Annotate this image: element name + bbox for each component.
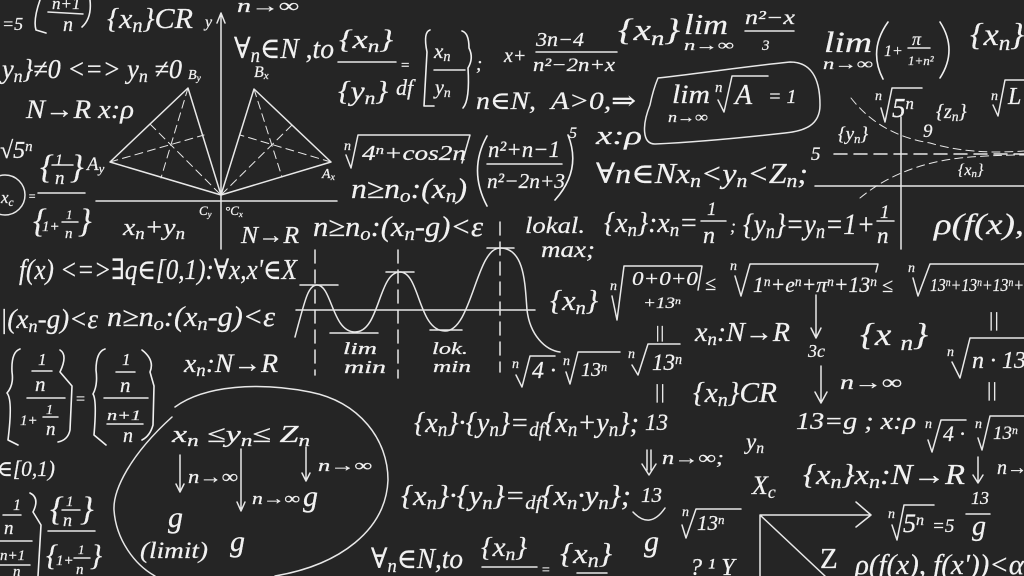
coordinate axes with two triangles: y xyxy=(203,14,213,31)
formula: compound fraction equality: 1+ xyxy=(20,413,38,429)
chart: graph with converging sequences: {yn} xyxy=(838,124,868,146)
formula: limit n squared minus x over 3: lim xyxy=(684,9,728,41)
formula: root 5 top right xyxy=(875,88,922,123)
formula: 13 over g: 13 xyxy=(971,488,989,508)
formula: root 13 bottom xyxy=(682,505,741,538)
coordinate axes with two triangles: °Cx xyxy=(225,203,243,219)
formula: root 5 equals 5: 5n xyxy=(903,509,924,538)
formula: root n times 13: n xyxy=(947,345,954,360)
formula: limit circle: = xyxy=(28,189,36,203)
formula: bottom left fractions: } xyxy=(80,491,94,528)
formula: limit circle: xc xyxy=(0,188,14,209)
text: local max: max; xyxy=(541,237,595,262)
formula: 13 underbrace g: g xyxy=(644,525,659,558)
formula: root L right edge xyxy=(991,80,1024,116)
chart: wave with extremes: min xyxy=(344,357,386,377)
formula: root 4 dot root 13 in middle: 13n xyxy=(581,359,607,381)
formula: compound fraction equality: 1 xyxy=(38,350,46,369)
formula: compound fraction equality: n xyxy=(123,425,133,447)
chart: wave with extremes: lok. xyxy=(432,339,468,358)
formula: x_n equals 1 over n: 1 xyxy=(707,199,716,220)
formula: root of thirteens: 13n+13n+13n+ xyxy=(930,275,1024,295)
formula: compound fraction equality: 1 xyxy=(122,350,130,369)
coordinate axes with two triangles: Cy xyxy=(199,203,212,219)
arrow: implies n to infinity: n→∞; xyxy=(662,448,724,469)
formula: y_n equals 1 plus 1 over n: 1 xyxy=(880,202,890,223)
formula: root 4 dot root 13 in middle: || xyxy=(655,323,664,342)
formula: y_n equals 1 plus 1 over n: {yn}=yn=1+ xyxy=(743,208,875,243)
formula: for all n less than: ∀n∈Nx n<yn<Zn; xyxy=(596,159,808,192)
formula: root n times 13: || xyxy=(988,309,999,331)
formula: n at least n0 second row: n≥no:(xn-g)<ε xyxy=(107,302,275,335)
formula: root 4 dot root 13 right: 13n xyxy=(993,423,1018,444)
formula: bottom left fractions: 1+ xyxy=(56,553,74,569)
arrow: down to 3c xyxy=(807,295,827,403)
formula: bottom left fractions: { xyxy=(46,539,58,572)
arrow: down to n to infinity xyxy=(973,457,1024,483)
text: local max: lokal. xyxy=(525,213,585,238)
formula: x_n from N to R: xn:N→R xyxy=(183,349,278,380)
formula: x_n equals 1 over n: n xyxy=(703,223,715,249)
formula: n at least n0 x_n minus g: n≥no:(xn-g)<ε xyxy=(313,212,483,245)
formula: bottom left fractions: 1 xyxy=(78,542,84,557)
coordinate axes with two triangles xyxy=(85,13,337,249)
formula: compound fraction equality xyxy=(7,349,154,447)
formula: limit n squared minus x over 3: n²−x xyxy=(745,7,795,29)
callout: rounded box limit root A: A xyxy=(733,80,753,111)
formula: x_n equals 1 over n xyxy=(604,199,736,249)
formula: for all n bottom fraction xyxy=(371,532,612,576)
formula: x_n subset of R: {xn}CR xyxy=(107,3,193,37)
formula: root 4 dot root 13 right xyxy=(925,416,1024,452)
formula: fraction x_n over y_n xyxy=(338,25,482,108)
formula: root sum of powers: n xyxy=(730,259,737,274)
formula: root zeros plus 13: ≤ xyxy=(705,273,716,295)
formula: root 13 bottom: 13n xyxy=(697,511,725,535)
formula: nested fraction left xyxy=(33,149,92,242)
formula: bottom left fractions: } xyxy=(90,539,102,572)
formula: root 4 dot root 13 in middle: 13n xyxy=(652,350,682,375)
callout: rounded box limit root A: n→∞ xyxy=(668,110,708,126)
callout: ellipse with squeeze theorem: g xyxy=(168,501,183,534)
formula: y_n and X_c labels: Xc xyxy=(751,471,776,502)
formula: x_n brace top: {x n} xyxy=(618,12,681,50)
formula: nested fraction left: n xyxy=(55,168,64,189)
formula: fraction x_n over y_n: df xyxy=(396,75,416,100)
formula: root 4 dot root 13 in middle: n xyxy=(563,354,570,369)
formula: fraction x_n over y_n: ; xyxy=(476,54,482,75)
diagram: triangle with arrow: Z xyxy=(820,543,838,575)
chart: wave with extremes: min xyxy=(433,357,471,376)
formula: y_n and X_c labels: yn xyxy=(744,429,764,457)
arrow: down to 3c: 3c xyxy=(807,341,825,361)
arrow: implies n to infinity xyxy=(642,448,724,475)
formula: x_n brace right: {x n} xyxy=(860,316,928,355)
formula: x_n then N to R lower right: {xn}xn:N→R xyxy=(803,460,965,493)
formula: power of five fraction: n²+n−1 xyxy=(488,137,560,162)
callout: rounded box limit root A xyxy=(645,62,820,144)
formula: 13 underbrace g xyxy=(633,483,665,558)
formula: compound fraction equality: n xyxy=(46,419,56,440)
formula: root 5 equals 5 xyxy=(888,505,954,540)
formula: root 14 power n plus cos xyxy=(344,135,470,168)
formula: root 5 top right: n xyxy=(875,89,882,104)
formula: y_n equals 1 plus 1 over n: n xyxy=(877,223,888,248)
formula: root zeros plus 13 xyxy=(610,266,716,320)
formula: x_n plus y_n: xn+yn xyxy=(122,215,185,243)
formula: root 5 equals 5: =5 xyxy=(932,516,954,537)
formula: limit circle xyxy=(0,175,36,215)
formula: x_n brace beside wave: {xn} xyxy=(550,286,598,319)
formula: root of thirteens: n xyxy=(908,261,915,276)
formula: root zeros plus 13: 0+0+0 xyxy=(632,268,698,290)
formula: 13 over g xyxy=(966,488,990,542)
formula: x_n brace top right: {xn} xyxy=(970,16,1024,55)
formula: bottom left fractions: { xyxy=(50,491,64,528)
formula: rho f of x: ρ(f(x), xyxy=(933,208,1024,241)
formula: limit one plus pi: π xyxy=(912,29,922,49)
formula: fraction 3n minus 4 xyxy=(503,29,617,76)
formula: root of thirteens xyxy=(908,261,1024,296)
chart: graph with converging sequences: 5 xyxy=(811,144,820,165)
formula: root 4 dot root 13 right: n xyxy=(925,417,932,432)
callout: rounded box limit root A: lim xyxy=(672,80,710,109)
formula: fraction x_n over y_n: xn xyxy=(433,39,450,65)
coordinate axes with two triangles: By xyxy=(188,68,202,84)
formula: fraction x_n over y_n: = xyxy=(400,58,410,74)
formula: root 4 dot root 13 in middle: 4 · xyxy=(532,358,556,384)
diagram: triangle with arrow xyxy=(760,502,871,576)
formula: limit n squared minus x over 3: 3 xyxy=(761,38,770,54)
callout: ellipse with squeeze theorem: n→∞ xyxy=(318,456,372,475)
formula: root five left: √5n xyxy=(0,138,33,164)
formula: for all n bottom fraction: {xn} xyxy=(560,538,612,572)
formula: root zeros plus 13: +13 n xyxy=(643,295,681,312)
formula: bottom left fractions: 1 xyxy=(13,497,21,514)
formula: bottom left fractions: 1 xyxy=(66,494,74,510)
callout: ellipse with squeeze theorem: n→∞ xyxy=(188,467,238,488)
formula: limit one plus pi: 1+n² xyxy=(908,53,935,68)
formula: x_n subset R centre: {xn}CR xyxy=(693,378,777,411)
formula: bottom left fractions xyxy=(0,491,102,576)
formula: 13 over g: g xyxy=(972,511,986,542)
formula: n at least n0: n≥n o:(xn) xyxy=(351,174,467,207)
callout: ellipse with squeeze theorem: (limit) xyxy=(140,538,208,563)
chart: wave with extremes: lim xyxy=(343,339,377,358)
formula: x_n equals 1 over n: ; xyxy=(730,216,736,236)
formula: N to R x rho: N→R x:ρ xyxy=(25,95,134,124)
formula: bottom left fractions: n+1 xyxy=(0,548,25,564)
number: 13 after sum: 13 xyxy=(645,410,668,435)
formula: nested fraction left: 1 xyxy=(66,207,72,222)
formula: fraction 3n minus 4: n²−2n+x xyxy=(533,55,616,76)
coordinate axes with two triangles: Ay xyxy=(85,154,105,176)
formula: root 14 power n plus cos: 4n+cos2n xyxy=(362,141,466,165)
chart: graph with converging sequences: {zn} xyxy=(936,101,967,124)
callout: ellipse with squeeze theorem xyxy=(114,387,388,576)
formula: root 4 dot root 13 in middle: n xyxy=(512,357,519,372)
chart: graph with converging sequences xyxy=(811,98,1024,249)
formula: fraction 3n minus 4: 3n−4 xyxy=(535,29,584,51)
formula: y_n not zero: yn}≠0 <=> yn ≠0 xyxy=(0,54,182,86)
formula: root 4 dot root 13 in middle xyxy=(512,323,682,403)
callout: rounded box limit root A: = 1 xyxy=(768,86,796,108)
formula: power of five fraction: n²−2n+3 xyxy=(487,169,565,193)
formula: limit one plus pi: n→∞ xyxy=(823,56,873,73)
formula: root L right edge: L xyxy=(1007,84,1021,110)
formula: root 14 power n plus cos: n xyxy=(344,139,351,154)
formula: top left fraction equals five: =5 xyxy=(2,14,23,34)
formula: 13 equals g x rho: 13=g ; x:ρ xyxy=(796,409,916,435)
formula: fraction 3n minus 4: x+ xyxy=(503,45,526,67)
callout: ellipse with squeeze theorem: n→∞ xyxy=(252,489,300,508)
formula: for all n bottom fraction: {xn} xyxy=(481,532,527,564)
callout: ellipse with squeeze theorem: g xyxy=(303,480,318,513)
callout: ellipse with squeeze theorem: g xyxy=(230,525,245,558)
formula: root zeros plus 13: n xyxy=(610,279,617,294)
formula: nested fraction left: n xyxy=(65,226,72,242)
formula: root 4 dot root 13 in middle: n xyxy=(628,347,635,362)
formula: root 5 equals 5: n xyxy=(888,507,895,522)
formula: root 4 dot root 13 in middle: || xyxy=(654,381,665,403)
formula: power of five fraction xyxy=(478,125,577,206)
formula: product of sequences: {xn}·{yn}=df{xn·yn}; xyxy=(401,481,631,514)
formula: nested fraction left: { xyxy=(33,203,47,240)
formula: n to infinity right of arrow: n→∞ xyxy=(840,372,902,394)
formula: root sum of powers: 1n+en+πn+13n xyxy=(753,272,877,297)
formula: root 13 bottom: n xyxy=(682,505,689,520)
callout: rounded box limit root A: n xyxy=(715,80,722,96)
formula: compound fraction equality: n xyxy=(120,373,130,397)
formula: limit one plus pi xyxy=(823,22,949,79)
formula: x_n equals 1 over n: {xn}:xn= xyxy=(604,208,698,241)
formula: root L right edge: n xyxy=(991,89,998,104)
formula: limit one plus pi: lim xyxy=(824,26,872,59)
formula: root sum of powers: ≤ xyxy=(882,275,893,297)
formula: root sum of powers xyxy=(730,259,893,297)
formula: x rho middle: x:ρ xyxy=(595,121,642,150)
formula: nested fraction left: 1 xyxy=(55,152,63,169)
formula: bottom left fractions: n xyxy=(63,510,72,530)
formula: fraction x_n over y_n: {yn} xyxy=(338,76,388,108)
formula: nested fraction left: 1+ xyxy=(42,219,60,235)
chart: graph with converging sequences: 9 xyxy=(923,121,933,142)
formula: root n times 13 xyxy=(947,309,1024,401)
formula: 13 underbrace g: 13 xyxy=(641,483,662,507)
formula: top left fraction equals five xyxy=(2,0,90,36)
formula: fraction x_n over y_n: {x n} xyxy=(339,25,394,56)
formula: fraction x_n over y_n: yn xyxy=(433,77,451,100)
formula: compound fraction equality: = xyxy=(75,391,86,408)
formula: n in N: n∈N, xyxy=(476,88,536,115)
formula: compound fraction equality: n+1 xyxy=(107,408,141,424)
formula: A greater than 0 implies: A>0,⇒ xyxy=(549,88,636,115)
callout: ellipse with squeeze theorem: x n ≤y n≤ Z n xyxy=(171,422,310,450)
formula: limit one plus pi: 1+ xyxy=(884,43,903,60)
coordinate axes with two triangles: Ax xyxy=(321,167,336,183)
formula: bottom left fractions: n xyxy=(4,518,14,539)
formula: left edge x_n minus g: |(xn-g)<ε xyxy=(0,304,98,336)
formula: power of five fraction: 5 xyxy=(569,125,577,142)
formula: for all n in N: ∀n∈N ,to xyxy=(234,33,334,67)
chart: graph with converging sequences: {xn} xyxy=(958,162,984,180)
chart: wave with extremes xyxy=(295,222,560,378)
formula: y_n and X_c labels xyxy=(744,429,776,502)
formula: compound fraction equality: 1 xyxy=(46,403,53,418)
formula: nested fraction left: } xyxy=(78,203,92,240)
formula: limit n squared minus x over 3: n→∞ xyxy=(684,38,734,54)
formula: top left fraction equals five: n xyxy=(63,14,73,36)
formula: root 4 dot root 13 right: 4 · xyxy=(943,421,965,446)
formula: x_n N to R centre right: xn:N→R xyxy=(694,317,791,349)
formula: nested fraction left: } xyxy=(70,149,84,186)
formula: N to R under axes: N→R xyxy=(240,223,299,249)
formula: exists q: f(x) <=>∃q∈[0,1):∀x,x'∈X xyxy=(19,255,298,286)
formula: nested fraction left: { xyxy=(40,149,54,186)
formula: root n times 13: || xyxy=(986,379,997,401)
coordinate axes with two triangles: Bx xyxy=(254,64,269,82)
formula: root 5 top right: 5n xyxy=(892,93,914,123)
formula: compound fraction equality: n xyxy=(35,372,46,396)
text: local max xyxy=(525,213,595,262)
formula: root 4 dot root 13 right: n xyxy=(975,417,982,432)
formula: limit n squared minus x over 3 xyxy=(684,7,795,54)
formula: sum of sequences: {xn}·{yn}=df{xn+yn}; xyxy=(414,407,639,441)
